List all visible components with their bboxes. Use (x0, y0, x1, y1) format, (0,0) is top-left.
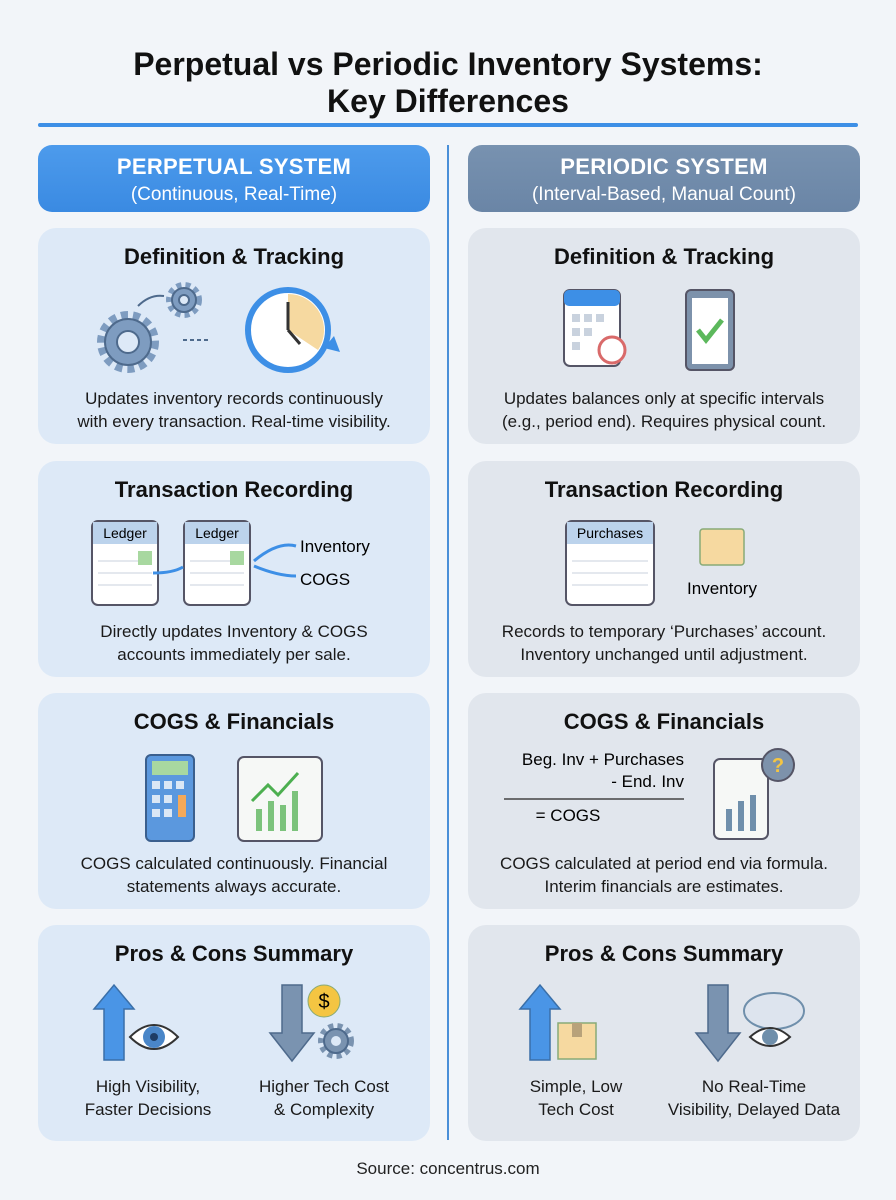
panel: perpetual COGS: COGS calculated continuously. Financial (81, 854, 387, 873)
icon: calendar and clipboard (563, 289, 735, 371)
icons: up arrow eye, down arrow coin (92, 984, 354, 1062)
panel: periodic COGS (468, 693, 860, 909)
header: periodic: (Interval-Based, Manual Count) (532, 184, 796, 205)
title: Key Differences (327, 83, 569, 119)
source footer: Source: concentrus.com (356, 1159, 540, 1178)
icon: purchases ledger and box (565, 520, 757, 606)
panel: perpetual pros cons: High Visibility, (96, 1077, 200, 1096)
icon: ledgers: Inventory (300, 537, 370, 556)
panel: periodic pros cons: Tech Cost (538, 1100, 614, 1119)
panel: perpetual definition: with every transaction. Real-time visibility. (77, 412, 391, 431)
panel: periodic COGS: Interim financials are estimates. (544, 877, 784, 896)
icon: purchases ledger and box: Inventory (687, 579, 757, 598)
panel: periodic definition: Updates balances only at specific intervals (504, 389, 824, 408)
panel: perpetual definition (38, 228, 430, 444)
header: periodic (468, 145, 860, 212)
icon: calculator and chart (145, 754, 323, 842)
formula and chart: - End. Inv (611, 772, 684, 791)
panel: perpetual pros cons: Faster Decisions (85, 1100, 211, 1119)
title (133, 46, 763, 119)
title: Perpetual vs Periodic Inventory Systems: (133, 46, 763, 82)
header: perpetual: (Continuous, Real-Time) (131, 184, 337, 205)
panel: periodic definition: Definition & Tracking (554, 244, 774, 269)
icon: ledgers (91, 520, 370, 606)
panel: periodic pros cons: Pros & Cons Summary (545, 941, 783, 966)
panel: perpetual pros cons (38, 925, 430, 1141)
icon: ledgers: Ledger (195, 525, 239, 541)
panel: perpetual transaction: Directly updates Inventory & COGS (100, 622, 368, 641)
panel: periodic pros cons (468, 925, 860, 1141)
panel: perpetual definition: Updates inventory records continuously (85, 389, 383, 408)
icons: up arrow eye, down arrow coin: $ (318, 991, 330, 1013)
panel: periodic definition: (e.g., period end). Requires physical count. (502, 412, 826, 431)
formula and chart: Beg. Inv + Purchases (522, 750, 684, 769)
formula and chart (504, 748, 795, 840)
panel: perpetual definition: Definition & Tracking (124, 244, 344, 269)
panel: periodic COGS: COGS calculated at period end via formula. (500, 854, 828, 873)
panel: periodic transaction (468, 461, 860, 677)
panel: perpetual transaction (38, 461, 430, 677)
formula and chart: ? (772, 755, 784, 777)
icon: purchases ledger and box: Purchases (577, 525, 643, 541)
panel: periodic pros cons: Simple, Low (530, 1077, 622, 1096)
icon: gears and clock (97, 282, 340, 373)
panel: perpetual COGS: COGS & Financials (134, 709, 334, 734)
panel: periodic transaction: Transaction Recording (545, 477, 783, 502)
icon: ledgers: COGS (300, 570, 350, 589)
panel: perpetual pros cons: & Complexity (274, 1100, 374, 1119)
formula and chart: = COGS (536, 806, 600, 825)
header: periodic: PERIODIC SYSTEM (560, 154, 768, 179)
panel: perpetual transaction: accounts immediately per sale. (117, 645, 351, 664)
panel: perpetual COGS (38, 693, 430, 909)
header: perpetual: PERPETUAL SYSTEM (117, 154, 351, 179)
panel: perpetual pros cons: Pros & Cons Summary (115, 941, 353, 966)
panel: perpetual transaction: Transaction Recording (115, 477, 353, 502)
icon: ledgers: Ledger (103, 525, 147, 541)
panel: periodic COGS: COGS & Financials (564, 709, 764, 734)
icons: up arrow box, down arrow cloud eye (518, 984, 805, 1062)
panel: periodic definition (468, 228, 860, 444)
panel: perpetual COGS: statements always accurate. (127, 877, 341, 896)
panel: periodic pros cons: No Real-Time (702, 1077, 806, 1096)
panel: periodic transaction: Records to temporary ‘Purchases’ account. (502, 622, 826, 641)
panel: periodic transaction: Inventory unchanged until adjustment. (520, 645, 808, 664)
header: perpetual (38, 145, 430, 212)
panel: perpetual pros cons: Higher Tech Cost (259, 1077, 389, 1096)
panel: periodic pros cons: Visibility, Delayed Data (668, 1100, 840, 1119)
